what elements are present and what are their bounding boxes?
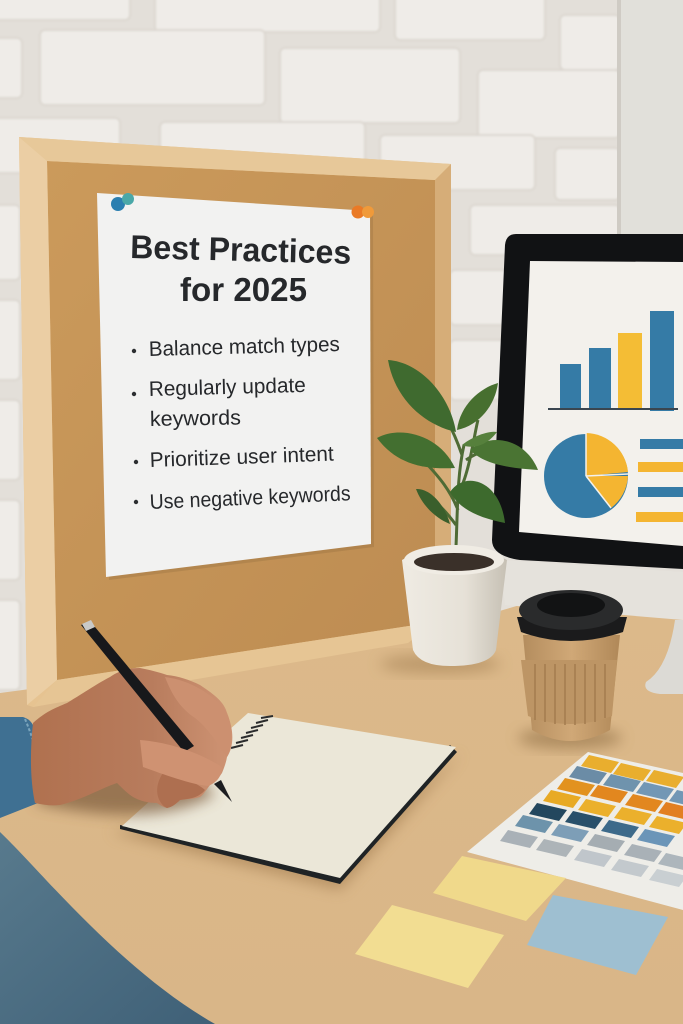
pot shadow xyxy=(380,654,500,674)
bar chart xyxy=(548,311,678,411)
pen xyxy=(81,620,194,752)
swatches xyxy=(500,755,683,887)
poster title: for 2025 xyxy=(180,271,307,308)
poster: best practices xyxy=(97,193,371,577)
stems xyxy=(425,400,505,566)
color grid sheet xyxy=(467,752,683,910)
hand xyxy=(31,668,232,808)
plant pot xyxy=(402,545,507,666)
leaves xyxy=(388,360,456,432)
notebook xyxy=(110,713,462,890)
poster shadow xyxy=(100,196,374,580)
person's arm xyxy=(0,832,215,1024)
pen tip xyxy=(214,780,232,802)
index finger xyxy=(165,677,232,757)
hand shadow xyxy=(35,760,215,815)
sleeve xyxy=(0,717,42,818)
pie chart xyxy=(544,433,628,518)
pins xyxy=(111,193,374,218)
poster bullets: Regularly update xyxy=(149,374,306,401)
monitor stand xyxy=(645,620,683,694)
sticky notes xyxy=(355,856,668,988)
poster bullets xyxy=(132,333,351,514)
desk surface xyxy=(0,605,683,1024)
spiral binding xyxy=(231,716,273,748)
hand with pen xyxy=(0,620,232,818)
poster bullets: Use negative keywords xyxy=(149,482,351,514)
poster bullets: keywords xyxy=(150,406,241,431)
corkboard xyxy=(19,137,451,707)
legend bars xyxy=(636,439,683,522)
monitor xyxy=(492,234,683,694)
gripping fingers xyxy=(157,770,205,808)
poster title xyxy=(130,228,352,308)
plant xyxy=(377,360,538,674)
board frame xyxy=(19,137,451,707)
poster bullets: Balance match types xyxy=(149,333,340,361)
coffee cup xyxy=(517,590,627,749)
thumb xyxy=(140,740,222,786)
poster title: Best Practices xyxy=(130,228,352,271)
background: brick wall xyxy=(0,0,683,720)
poster bullets: Prioritize user intent xyxy=(149,443,334,472)
